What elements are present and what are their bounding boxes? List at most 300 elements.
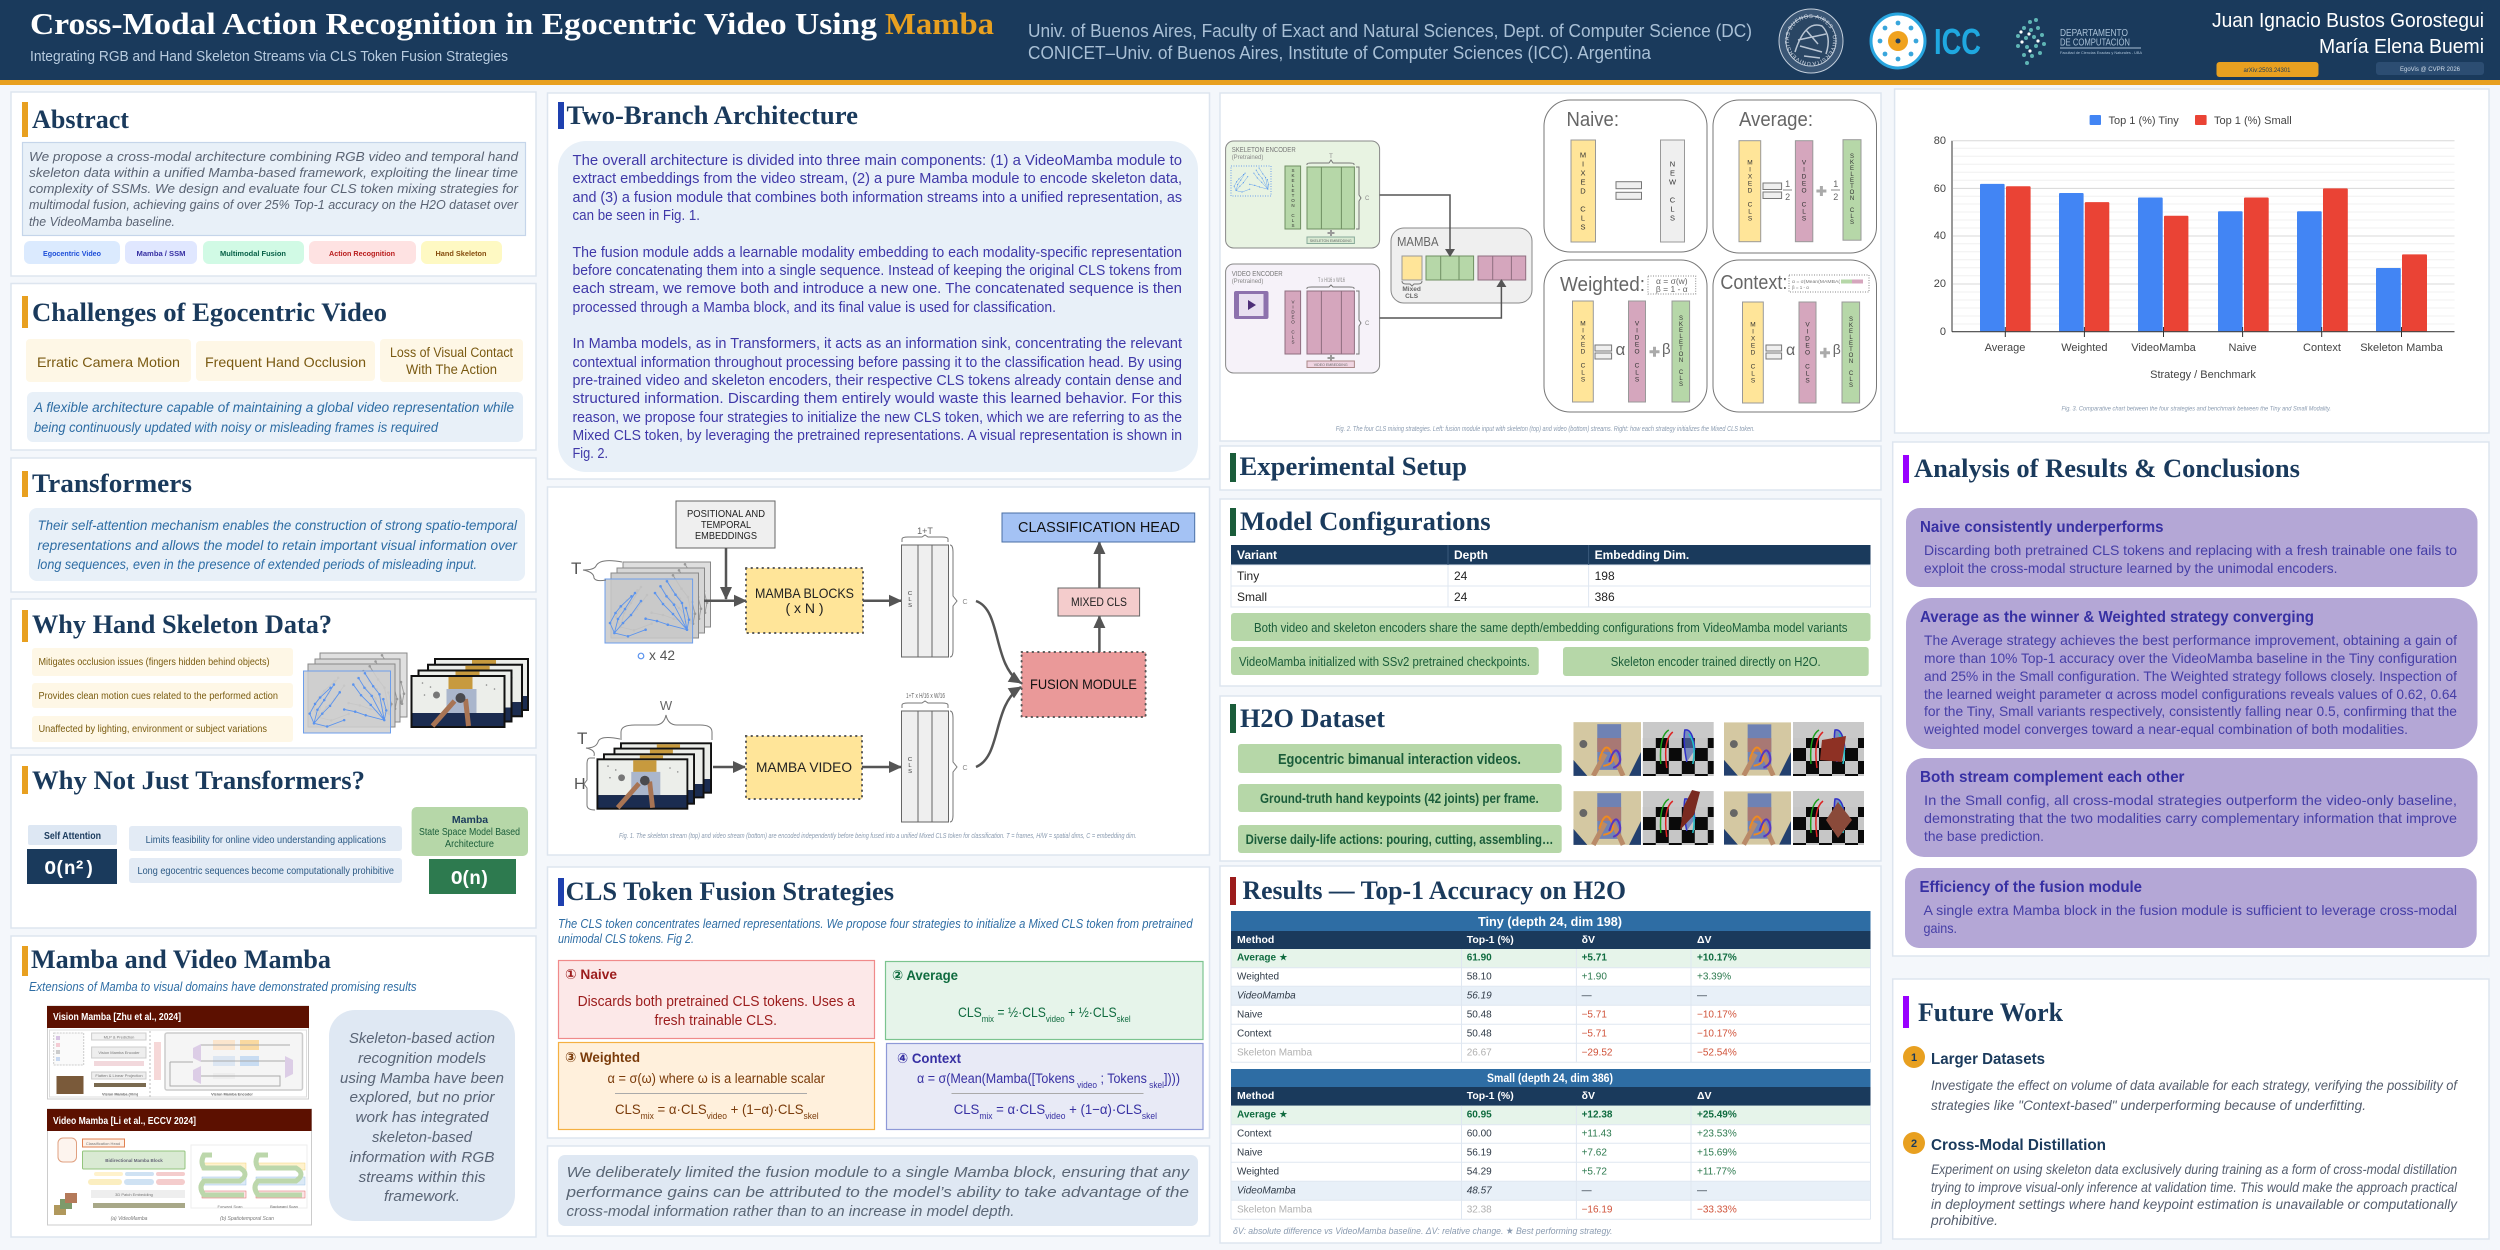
table: small results: −33.33%	[1697, 1204, 1737, 1215]
abstract text: multimodal fusion, achieving gains of over 25% Top-1 accuracy on the H2O dataset over	[29, 197, 519, 212]
figure: vision mamba: Vision Mamba Encoder	[211, 1092, 253, 1096]
finding: streams complement: demonstrating that the two modalities carry complementary information that improve	[1924, 810, 2457, 826]
note: skeleton training: Skeleton encoder trained directly on H2O.	[1611, 655, 1821, 669]
table: small results: Weighted	[1237, 1166, 1279, 1177]
panel: why not just transformers	[11, 755, 536, 928]
strategy diagram: context: β = 1 - α	[1792, 285, 1809, 290]
transformers text: long sequences, even in the presence of extended periods of misleading input.	[38, 557, 477, 572]
strategy card: naive	[558, 960, 874, 1038]
table: tiny results: +10.17%	[1697, 953, 1737, 964]
mamba complexity	[412, 807, 528, 894]
keyword chips: Egocentric Video	[43, 249, 101, 258]
architecture description: Mixed CLS token, by leveraging the pretrained representations. A visual representation is shown in	[572, 427, 1182, 444]
finding: fusion efficiency: gains.	[1924, 920, 1957, 936]
note: skeleton training	[1563, 647, 1869, 676]
strategy diagram: average: 1	[1785, 179, 1790, 189]
benefit list: Unaffected by lighting, environment or subject variations	[38, 724, 267, 735]
challenge: frequent hand occlusion: Frequent Hand Occlusion	[205, 354, 366, 370]
mamba video	[746, 736, 862, 799]
authors: María Elena Buemi	[2319, 36, 2484, 58]
panel: figure 2 mixing strategies	[1220, 93, 1881, 441]
affiliations	[1028, 21, 1752, 63]
callout: research gap: recognition models	[358, 1051, 486, 1067]
arrow: skeleton into mamba	[1380, 195, 1450, 256]
table: small results: +5.72	[1582, 1166, 1607, 1177]
bar chart: VideoMamba	[2131, 342, 2197, 354]
strategy diagram: context: SKELETON CLS	[1848, 317, 1854, 389]
video input stack: T	[577, 729, 587, 748]
strategy diagram: context: α	[1786, 342, 1795, 359]
video encoder: VIDEO EMBEDDING	[1314, 363, 1348, 367]
badge: number 2: 2	[1911, 1138, 1917, 1150]
table: small results: Top-1 (%)	[1467, 1090, 1514, 1102]
self attention complexity	[27, 825, 117, 884]
icon: skeleton frame stack	[304, 653, 407, 733]
table: tiny results: Naive	[1237, 1010, 1263, 1021]
video encoder: T x H/16 x W/16	[1318, 278, 1345, 284]
strategy diagram: weighted	[1544, 260, 1707, 412]
table: tiny results: 61.90	[1467, 953, 1492, 964]
strategy diagram: weighted: α	[1616, 340, 1626, 359]
arrow: video to mamba video	[713, 766, 745, 768]
dataset sample images	[1573, 722, 1864, 845]
table: model variants: 24	[1454, 590, 1468, 604]
panel: mamba and video mamba	[11, 936, 536, 1237]
figure: video mamba: Bidirectional Mamba Block	[105, 1158, 163, 1163]
logo: Departamento de Computación: DEPARTAMENTO	[2060, 28, 2128, 39]
bar chart	[1934, 135, 2454, 381]
callout: research gap: Skeleton-based action	[349, 1031, 495, 1047]
strategy card: naive: fresh trainable CLS.	[654, 1012, 777, 1029]
strategy diagram: context: VIDEO CLS	[1804, 322, 1811, 384]
heading: mamba: Mamba and Video Mamba	[31, 945, 331, 974]
logo: University of Buenos Aires seal	[1778, 8, 1844, 74]
intro text: unimodal CLS tokens. Fig 2.	[558, 932, 694, 946]
challenge: loss of visual contact: With The Action	[406, 362, 497, 377]
skeleton input stack: x 42	[649, 647, 675, 663]
video encoder: (Pretrained)	[1232, 279, 1263, 285]
strategy card: average	[886, 962, 1203, 1040]
table: small results	[1231, 1069, 1870, 1219]
note: video checkpoints	[1231, 647, 1539, 675]
architecture description: each stream, we remove both and introduce a new one. The concatenated sequence is then	[572, 280, 1182, 297]
subheading: Extensions of Mamba to visual domains have demonstrated promising results	[29, 979, 417, 994]
finding: average winner: The Average strategy achieves the best performance improvement, obtaining a gain of	[1924, 632, 2457, 648]
skeleton encoder: SKELETON ENCODER	[1232, 147, 1296, 154]
table: tiny results: −5.71	[1582, 1010, 1607, 1021]
skeleton token stack: 1+T	[917, 526, 933, 536]
strategy card: average: CLS	[958, 1004, 985, 1020]
transformers text	[29, 508, 525, 581]
mamba complexity: Mamba	[452, 814, 488, 826]
figure: video mamba: (b) Spatiotemporal Scan	[220, 1216, 274, 1222]
bar chart: Average	[1985, 342, 2025, 354]
logo: ICC: ICC	[1934, 21, 1981, 62]
strategy diagram: weighted: β	[1662, 341, 1671, 358]
heading: challenges: Challenges of Egocentric Video	[32, 298, 387, 327]
strategy card: average: + ½·CLS	[1065, 1004, 1117, 1020]
strategy card: naive: Discards both pretrained CLS tokens. Uses a	[578, 993, 856, 1010]
dataset facts: Egocentric bimanual interaction videos.	[1278, 751, 1521, 768]
transformer limits: Limits feasibility for online video understanding applications	[146, 834, 386, 846]
callout: research gap: framework.	[384, 1189, 460, 1205]
strategy diagram: naive	[1544, 100, 1707, 252]
table: tiny results: +3.39%	[1697, 972, 1731, 983]
table: model variants: Variant	[1237, 548, 1277, 562]
challenge: frequent hand occlusion	[196, 341, 375, 381]
architecture description: The fusion module adds a learnable modality embedding to each modality-specific representation	[572, 244, 1182, 261]
table: model variants: Depth	[1454, 548, 1488, 562]
strategy card: weighted	[558, 1042, 874, 1130]
future item: cross-modal distillation: in deployment settings where hand keypoint estimation is unavailable or computationally	[1931, 1197, 2458, 1212]
strategy card: average: skel	[1117, 1014, 1131, 1024]
table: model variants: Tiny	[1237, 569, 1259, 583]
title: Cross-Modal Action Recognition in Egocentric Video Using	[30, 6, 878, 41]
finding: average winner: Average as the winner & Weighted strategy converging	[1920, 609, 2314, 626]
table: small results: +23.53%	[1697, 1128, 1737, 1139]
table: small results: Context	[1237, 1128, 1272, 1139]
strategy card: weighted: video	[707, 1111, 727, 1121]
video encoder: VIDEO ENCODER	[1232, 271, 1283, 278]
mamba fusion block: Mixed	[1402, 286, 1421, 293]
panel: CLS token fusion strategies	[548, 867, 1210, 1138]
badge: arXiv: arXiv:2503.24301	[2243, 68, 2291, 74]
panel: why hand skeleton data	[11, 599, 536, 748]
bar chart: 20	[1934, 278, 1946, 290]
panel: H2O dataset	[1220, 696, 1881, 861]
callout: research gap: explored, but no prior	[350, 1090, 496, 1106]
mamba blocks: ( x N )	[785, 600, 824, 616]
future item: cross-modal distillation: trying to improve visual-only inference at validation time. This would make the approach practical	[1931, 1180, 2458, 1195]
table: tiny results: 58.10	[1467, 972, 1492, 983]
figure: vision mamba: MLP & Prediction	[104, 1034, 134, 1040]
strategy card: average: mix	[982, 1014, 994, 1024]
bar chart: 60	[1934, 183, 1946, 195]
heading: future work: Future Work	[1918, 998, 2064, 1027]
finding: average winner: weighted model converges toward a near-equal combination of both modalities.	[1923, 721, 2408, 737]
strategy card: context: ④ Context	[897, 1050, 961, 1066]
video encoder: C	[1365, 321, 1370, 327]
table: small results: +12.38	[1582, 1109, 1613, 1120]
finding: fusion efficiency	[1905, 868, 2477, 948]
dataset facts: Ground-truth hand keypoints (42 joints) per frame.	[1260, 791, 1539, 806]
finding: fusion efficiency: Efficiency of the fusion module	[1920, 879, 2142, 896]
panel: challenges	[11, 284, 536, 450]
table: small results: Method	[1237, 1090, 1274, 1102]
table: tiny results: 26.67	[1467, 1048, 1492, 1059]
title: Mamba	[885, 6, 995, 41]
architecture description: extract embeddings from the video stream, (2) a pure Mamba module to encode skeleton data,	[572, 170, 1182, 187]
table: tiny results: Tiny (depth 24, dim 198)	[1478, 914, 1622, 929]
header banner	[0, 0, 2500, 85]
callout: research gap: information with RGB	[350, 1150, 495, 1166]
fusion module	[1022, 652, 1146, 717]
keyword chips: Multimodal Fusion	[220, 249, 286, 258]
video input stack: H	[574, 776, 586, 793]
finding: streams complement: Both stream complement each other	[1920, 769, 2184, 786]
strategy diagram: naive: NEW CLS	[1668, 160, 1677, 222]
logo: Departamento de Computación: Facultad de Ciencias Exactas y Naturales - UBA	[2060, 51, 2143, 55]
strategy diagram: weighted: VIDEO CLS	[1634, 320, 1640, 384]
transformer limits: Long egocentric sequences become computationally prohibitive	[138, 865, 394, 877]
finding: naive underperforms: Naive consistently underperforms	[1920, 519, 2164, 536]
strategy card: context: ])))	[1164, 1071, 1180, 1086]
logo: Departamento de Computación: DE COMPUTACIÓN	[2060, 36, 2130, 48]
finding: streams complement	[1906, 758, 2478, 857]
finding: average winner: for the Tiny, Small variants respectively, consistently falling near 0.5, confirming that the	[1924, 703, 2457, 719]
logo: ICC	[1871, 14, 1981, 68]
figure: video mamba	[47, 1109, 312, 1225]
table: tiny results: ΔV	[1697, 934, 1712, 946]
heading: analysis: Analysis of Results & Conclusions	[1914, 454, 2300, 483]
architecture description: and (3) a fusion module that combines both information streams into a unified representation, as	[572, 189, 1182, 206]
table: tiny results: −5.71	[1582, 1029, 1607, 1040]
keyword chips: Hand Skeleton	[436, 249, 487, 258]
table: tiny results: Weighted	[1237, 972, 1279, 983]
transformers text: Their self-attention mechanism enables the construction of strong spatio-temporal	[38, 518, 518, 533]
table: small results: δV	[1582, 1090, 1595, 1102]
video encoder: VIDEO CLS	[1290, 300, 1296, 344]
badge: venue	[2376, 62, 2484, 75]
panel: design note	[548, 1146, 1210, 1236]
strategy diagram: average: Average:	[1739, 109, 1813, 131]
mamba blocks: MAMBA BLOCKS	[755, 585, 854, 601]
figure: vision mamba: Flatten & Linear Projection	[95, 1073, 143, 1078]
table: tiny results: Context	[1237, 1029, 1272, 1040]
mamba blocks	[746, 568, 863, 633]
skeleton encoder: T	[1329, 154, 1333, 160]
mamba video: MAMBA VIDEO	[756, 759, 852, 775]
figure: vision mamba: Vision Mamba Encoder	[98, 1050, 140, 1055]
challenge: loss of visual contact	[380, 339, 523, 382]
table: small results: −16.19	[1582, 1204, 1613, 1215]
strategy diagram: context: MIXED CLS	[1750, 322, 1756, 384]
strategy card: weighted: mix	[641, 1111, 654, 1121]
strategy diagram: average: 2	[1833, 192, 1838, 202]
video token stack: 1+T x H/16 x W/16	[906, 693, 945, 700]
arrow: mamba video to tokens	[862, 766, 901, 768]
abstract text	[22, 142, 526, 236]
finding: fusion efficiency: A single extra Mamba block in the fusion module is sufficient to leverage cross-modal	[1924, 902, 2457, 918]
strategy diagram: average: 2	[1785, 192, 1790, 202]
strategy card: average: video	[1046, 1014, 1065, 1024]
finding: average winner: more than 10% Top-1 accuracy over the VideoMamba baseline in the Tiny configuration	[1924, 650, 2457, 666]
strategy card: average: ② Average	[892, 967, 958, 983]
bar chart: Context	[2303, 342, 2341, 354]
architecture description: In Mamba models, as in Transformers, it acts as an information sink, concentrating the relevant	[572, 335, 1183, 352]
strategy diagram: naive: Naive:	[1566, 109, 1619, 131]
finding: streams complement: In the Small config, all cross-modal strategies outperform the video-only baseline,	[1924, 792, 2457, 808]
future item: cross-modal distillation	[1903, 1132, 2458, 1228]
skeleton input stack	[571, 559, 710, 663]
abstract text: the VideoMamba baseline.	[29, 214, 175, 229]
requirement callout: A flexible architecture capable of maintaining a global video representation while	[33, 400, 514, 415]
table: tiny results: VideoMamba	[1237, 991, 1296, 1002]
table: model variants	[1231, 545, 1870, 607]
table: tiny results: +1.90	[1582, 972, 1607, 983]
table: small results: 56.19	[1467, 1147, 1492, 1158]
strategy card: weighted: CLS	[615, 1101, 642, 1117]
table: small results: +25.49%	[1697, 1109, 1737, 1120]
authors: Juan Ignacio Bustos Gorostegui	[2212, 10, 2484, 32]
table: tiny results: 56.19	[1467, 991, 1492, 1002]
transformers text: representations and allows the model to retain important visual information over	[38, 538, 518, 553]
mamba fusion block	[1391, 228, 1532, 303]
bar chart: Skeleton Mamba	[2360, 342, 2444, 354]
requirement callout: being continuously updated with noisy or misleading frames is required	[34, 420, 438, 435]
note: shared configuration	[1231, 613, 1870, 641]
video token stack: CLS	[907, 757, 913, 775]
strategy diagram: weighted: β = 1 - α	[1656, 284, 1688, 294]
table: tiny results: —	[1697, 991, 1707, 1002]
figure: vision mamba: Vision Mamba (Vim)	[102, 1092, 139, 1096]
strategy card: context: α = σ(Mean(Mamba([Tokens	[917, 1071, 1087, 1086]
arrow: blocks to tokens	[863, 599, 901, 602]
figure: video mamba: 3D Patch Embedding	[115, 1192, 153, 1197]
table: small results: +11.43	[1582, 1128, 1612, 1139]
heading: transformers: Transformers	[32, 469, 192, 498]
table: tiny results: 50.48	[1467, 1010, 1492, 1021]
arrow: mixed to head	[1098, 542, 1101, 588]
strategy diagram: average: 1	[1833, 179, 1838, 189]
note: video checkpoints: VideoMamba initialized with SSv2 pretrained checkpoints.	[1239, 655, 1530, 669]
finding: naive underperforms: Discarding both pretrained CLS tokens and replacing with a fresh trainable one fails to	[1924, 542, 2457, 558]
strategy diagram: context: Context:	[1720, 272, 1787, 294]
chart legend: Top 1 (%) Tiny	[2108, 115, 2179, 127]
future item: larger datasets	[1903, 1046, 2458, 1113]
chart legend	[2090, 115, 2292, 127]
strategy card: context	[886, 1044, 1203, 1130]
table: small results: 48.57	[1467, 1185, 1492, 1196]
panel: analysis and conclusions	[1893, 442, 2489, 956]
table: small results: 54.29	[1467, 1166, 1492, 1177]
abstract text: We propose a cross-modal architecture combining RGB video and temporal hand	[29, 149, 519, 164]
mixed CLS	[1058, 588, 1140, 616]
strategy card: context: + (1−α)·CLS	[1065, 1101, 1142, 1117]
callout: research gap: streams within this	[358, 1170, 486, 1186]
video token stack	[902, 693, 968, 822]
heading: why hand skeleton: Why Hand Skeleton Data?	[32, 610, 332, 639]
self attention complexity: O(n²)	[44, 858, 95, 880]
arrow: skeleton to mamba blocks	[704, 599, 746, 602]
future item: larger datasets: Investigate the effect on volume of data available for each strategy, verifying the possibility of	[1931, 1078, 2458, 1093]
strategy card: context: CLS	[954, 1101, 981, 1117]
design note text	[558, 1155, 1198, 1226]
skeleton encoder: SKELETON CLS	[1290, 168, 1296, 228]
callout: research gap: using Mamba have been	[340, 1071, 504, 1087]
strategy card: weighted: α = σ(ω) where ω is a learnable scalar	[608, 1071, 825, 1086]
bar chart: Weighted	[2061, 342, 2108, 354]
badge: arXiv	[2216, 62, 2318, 77]
table: tiny results: Average ★	[1237, 953, 1288, 964]
strategy card: context: video	[1075, 1080, 1097, 1090]
challenge: erratic camera motion: Erratic Camera Motion	[37, 354, 180, 370]
panel: abstract	[11, 92, 536, 276]
figure: vision mamba	[47, 1006, 309, 1099]
finding: naive underperforms	[1906, 508, 2478, 587]
figure: vision mamba: Vision Mamba [Zhu et al., 2024]	[53, 1011, 181, 1023]
table: small results: Small (depth 24, dim 386)	[1487, 1071, 1613, 1085]
mixed CLS: MIXED CLS	[1071, 597, 1127, 609]
keyword chips: Mamba / SSM	[136, 249, 186, 258]
transformer limits	[129, 826, 402, 883]
chart legend: Top 1 (%) Small	[2214, 115, 2292, 127]
finding: average winner: and 25% in the Small configuration. The Weighted strategy follows closely. Inspection of	[1924, 668, 2457, 684]
table: small results: 60.95	[1467, 1109, 1492, 1120]
architecture description: processed through a Mamba block, and its final value is used for classification.	[572, 299, 1056, 316]
table: small results: +7.62	[1582, 1147, 1607, 1158]
panel: two-branch architecture	[548, 93, 1210, 479]
caption: figure 1: Fig. 1. The skeleton stream (top) and video stream (bottom) are encoded independently before being fused into a unified Mixed CLS token for classification. T = frames, H/W = spatial dims, C = embedding dim.	[619, 831, 1137, 840]
future item: larger datasets: Larger Datasets	[1931, 1051, 2045, 1068]
strategy diagram: average	[1713, 100, 1876, 253]
abstract text: skeleton data within a unified Mamba-based framework, exploiting the linear time	[29, 165, 518, 180]
table footnote: δV: absolute difference vs VideoMamba baseline. ΔV: relative change. ★ Best performing strategy.	[1233, 1226, 1612, 1237]
positional embeddings box: TEMPORAL	[701, 520, 751, 531]
table: tiny results: −29.52	[1582, 1048, 1613, 1059]
table: tiny results: Skeleton Mamba	[1237, 1048, 1312, 1059]
finding: naive underperforms: exploit the cross-modal structure learned by the unimodal encoders.	[1924, 560, 2338, 576]
table: tiny results: 50.48	[1467, 1029, 1492, 1040]
strategy diagram: average: VIDEO CLS	[1800, 160, 1808, 222]
strategy diagram: weighted: Weighted:	[1560, 274, 1645, 296]
arrow: video tokens to fusion	[976, 687, 1021, 767]
heading: why not: Why Not Just Transformers?	[32, 766, 365, 795]
classification head: CLASSIFICATION HEAD	[1018, 519, 1180, 536]
strategy diagram: weighted: MIXED CLS	[1580, 320, 1586, 384]
table: model variants: Small	[1237, 590, 1267, 604]
architecture description: can be seen in Fig. 1.	[572, 207, 700, 224]
table: small results: —	[1582, 1185, 1592, 1196]
heading: CLS strategies: CLS Token Fusion Strategies	[566, 877, 894, 906]
table: tiny results	[1231, 911, 1870, 1062]
strategy diagram: context: α = σ(Mean(MAMBA(	[1792, 279, 1841, 284]
arrow: embeddings down	[725, 548, 727, 599]
strategy diagram: weighted: α = σ(w)	[1656, 276, 1688, 286]
strategy diagram: naive: MIXED CLS	[1578, 150, 1588, 232]
table: tiny results: +5.71	[1582, 953, 1607, 964]
subtitle: Integrating RGB and Hand Skeleton Streams via CLS Token Fusion Strategies	[30, 48, 508, 65]
table: small results: —	[1697, 1185, 1707, 1196]
table: tiny results: −10.17%	[1697, 1029, 1737, 1040]
finding: streams complement: the base prediction.	[1924, 828, 2044, 844]
architecture description: Fig. 2.	[572, 445, 608, 462]
skeleton token stack: CLS	[907, 591, 913, 609]
figure: video mamba: (a) VideoMamba	[111, 1216, 148, 1222]
panel: results tables	[1220, 866, 1881, 1243]
strategy diagram: context	[1713, 260, 1876, 412]
heading: model configurations: Model Configurations	[1240, 507, 1491, 536]
heading: results: Results — Top-1 Accuracy on H2O	[1242, 876, 1626, 905]
challenge: loss of visual contact: Loss of Visual Contact	[390, 345, 513, 360]
panel: transformers	[11, 458, 536, 592]
panel: figure 1 architecture diagram	[548, 487, 1210, 855]
future item: cross-modal distillation: Experiment on using skeleton data exclusively during training as a form of cross-modal distillation	[1931, 1162, 2457, 1177]
table: tiny results: −10.17%	[1697, 1010, 1737, 1021]
video token stack: C	[962, 765, 968, 772]
strategy card: context: = α·CLS	[993, 1101, 1045, 1117]
table: small results: 60.00	[1467, 1128, 1492, 1139]
strategy card: naive: ① Naive	[565, 966, 617, 982]
affiliations: CONICET–Univ. of Buenos Aires, Institute of Computer Sciences (ICC). Argentina	[1028, 43, 1652, 63]
strategy card: context: mix	[979, 1111, 993, 1121]
strategy card: weighted: = α·CLS	[654, 1101, 707, 1117]
positional embeddings box: POSITIONAL AND	[687, 509, 765, 520]
strategy card: average: = ½·CLS	[994, 1004, 1046, 1020]
benefit list: Provides clean motion cues related to the performed action	[38, 691, 278, 702]
table: small results: Skeleton Mamba	[1237, 1204, 1312, 1215]
table: small results: +15.69%	[1697, 1147, 1737, 1158]
